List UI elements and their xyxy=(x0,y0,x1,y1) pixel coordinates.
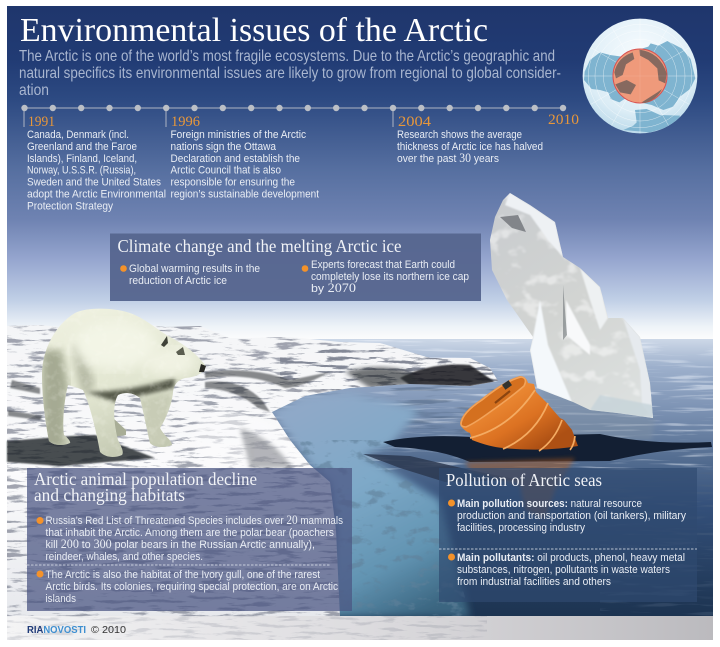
animal bullet: ivory gull xyxy=(36,569,338,605)
pollution bullet: sources: facilities, processing industry xyxy=(457,522,585,534)
timeline entry 1991: Norway, U.S.S.R. (Russia), xyxy=(27,164,136,176)
climate bullet left xyxy=(120,263,260,287)
climate bullet left: Global warming results in the xyxy=(129,263,260,275)
intro text: natural specifics its environmental issues are likely to grow from regional to global consider- xyxy=(19,65,561,82)
timeline xyxy=(21,105,566,127)
credit: RIA Novosti logo xyxy=(27,624,126,636)
credit: RIA Novosti logo: RIANOVOSTI xyxy=(27,624,86,636)
pollution bullet: sources: production and transportation (oil tankers), military xyxy=(457,510,686,522)
climate bullet left: reduction of Arctic ice xyxy=(129,275,227,287)
timeline entry 1996: Declaration and establish the xyxy=(170,153,300,165)
bear ground shadow xyxy=(7,435,155,466)
credit: RIA Novosti logo: © 2010 xyxy=(91,624,126,636)
timeline entry 2004: thickness of Arctic ice has halved xyxy=(397,141,543,153)
panel: climate change xyxy=(110,234,481,301)
animal heading: Arctic animal population decline xyxy=(34,469,257,489)
bottom strip xyxy=(7,616,713,640)
pollution bullet: pollutants: substances, nitrogen, pollutants in waste waters xyxy=(457,564,670,576)
bear far hind foot xyxy=(113,418,126,437)
pollution bullet: pollutants: Main pollutants: oil products, phenol, heavy metal xyxy=(457,552,685,564)
timeline entry 1991: 1991 xyxy=(28,114,55,130)
timeline entry 1996: responsible for ensuring the xyxy=(170,176,295,188)
timeline end year 2010: 2010 xyxy=(548,112,579,128)
animal bullet: ivory gull: Arctic birds. Its colonies, requiring special protection, are on Arctic xyxy=(46,581,338,593)
timeline entry 1996 xyxy=(170,114,320,200)
polar bear xyxy=(7,300,215,466)
intro text: ation xyxy=(19,82,49,99)
timeline entry 1991: Greenland and the Faroe xyxy=(27,141,137,153)
timeline entry 1996: 1996 xyxy=(171,114,200,130)
animal bullet: red list: reindeer, whales, and other species. xyxy=(46,551,203,563)
timeline entry 1996: region’s sustainable development xyxy=(170,188,320,200)
bear eye, ear and nose xyxy=(161,336,206,372)
animal bullet: ivory gull: islands xyxy=(46,593,76,605)
climate bullet right xyxy=(302,259,469,295)
intro text xyxy=(19,48,561,99)
timeline entry 2004: over the past 30 years xyxy=(397,150,499,165)
panel: pollution xyxy=(439,468,697,602)
timeline entry 1991 xyxy=(27,114,166,212)
pollution heading: Pollution of Arctic seas xyxy=(446,470,602,490)
timeline entry 2004: 2004 xyxy=(398,114,432,130)
animal heading xyxy=(34,469,257,505)
timeline entry 1996: Foreign ministries of the Arctic xyxy=(170,129,306,141)
timeline entry 1991: adopt the Arctic Environmental xyxy=(27,188,166,200)
oil slick xyxy=(363,434,712,482)
animal bullet: red list xyxy=(36,512,343,563)
icon: Arctic globe xyxy=(580,15,700,135)
header: title: Environmental issues of the Arctic xyxy=(20,12,488,49)
panel: animal population xyxy=(27,468,352,611)
pollution bullet: sources xyxy=(448,498,686,534)
intro text: The Arctic is one of the world’s most fragile ecosystems. Due to the Arctic’s geographic and xyxy=(19,48,555,65)
climate bullet right: Experts forecast that Earth could xyxy=(311,259,455,271)
animal bullet: ivory gull: The Arctic is also the habitat of the Ivory gull, one of the rarest xyxy=(46,569,321,581)
pollution bullet: sources: Main pollution sources: natural resource xyxy=(457,498,642,510)
timeline entry 1996: nations sign the Ottawa xyxy=(170,141,277,153)
timeline entry 1991: Canada, Denmark (incl. xyxy=(27,129,129,141)
animal bullet: red list: Russia’s Red List of Threatened Species includes over 20 mammals xyxy=(46,512,343,527)
timeline entry 1991: Protection Strategy xyxy=(27,200,113,212)
climate bullet right: by 2070 xyxy=(311,280,356,295)
timeline entry 1996: Arctic Council that is also xyxy=(170,164,281,176)
animal bullet: red list: that inhabit the Arctic. Among them are the polar bear (poachers xyxy=(46,527,334,539)
timeline entry 1991: Islands), Finland, Iceland, xyxy=(27,153,137,165)
iceberg xyxy=(485,190,660,440)
animal heading: and changing habitats xyxy=(34,485,185,505)
animal bullet: red list: kill 200 to 300 polar bears in the Russian Arctic annually), xyxy=(46,536,315,551)
barrel reflection xyxy=(465,458,575,520)
pollution bullet: pollutants xyxy=(448,552,685,588)
icon: orange oil barrel xyxy=(460,376,578,451)
climate bullet right: completely lose its northern ice cap xyxy=(311,271,469,283)
timeline entry 2004 xyxy=(397,114,543,165)
timeline entry 1991: Sweden and the United States xyxy=(27,176,161,188)
climate heading: Climate change and the melting Arctic ice xyxy=(118,236,402,256)
timeline entry 2004: Research shows the average xyxy=(397,129,522,141)
pollution bullet: pollutants: from industrial facilities and others xyxy=(457,576,611,588)
